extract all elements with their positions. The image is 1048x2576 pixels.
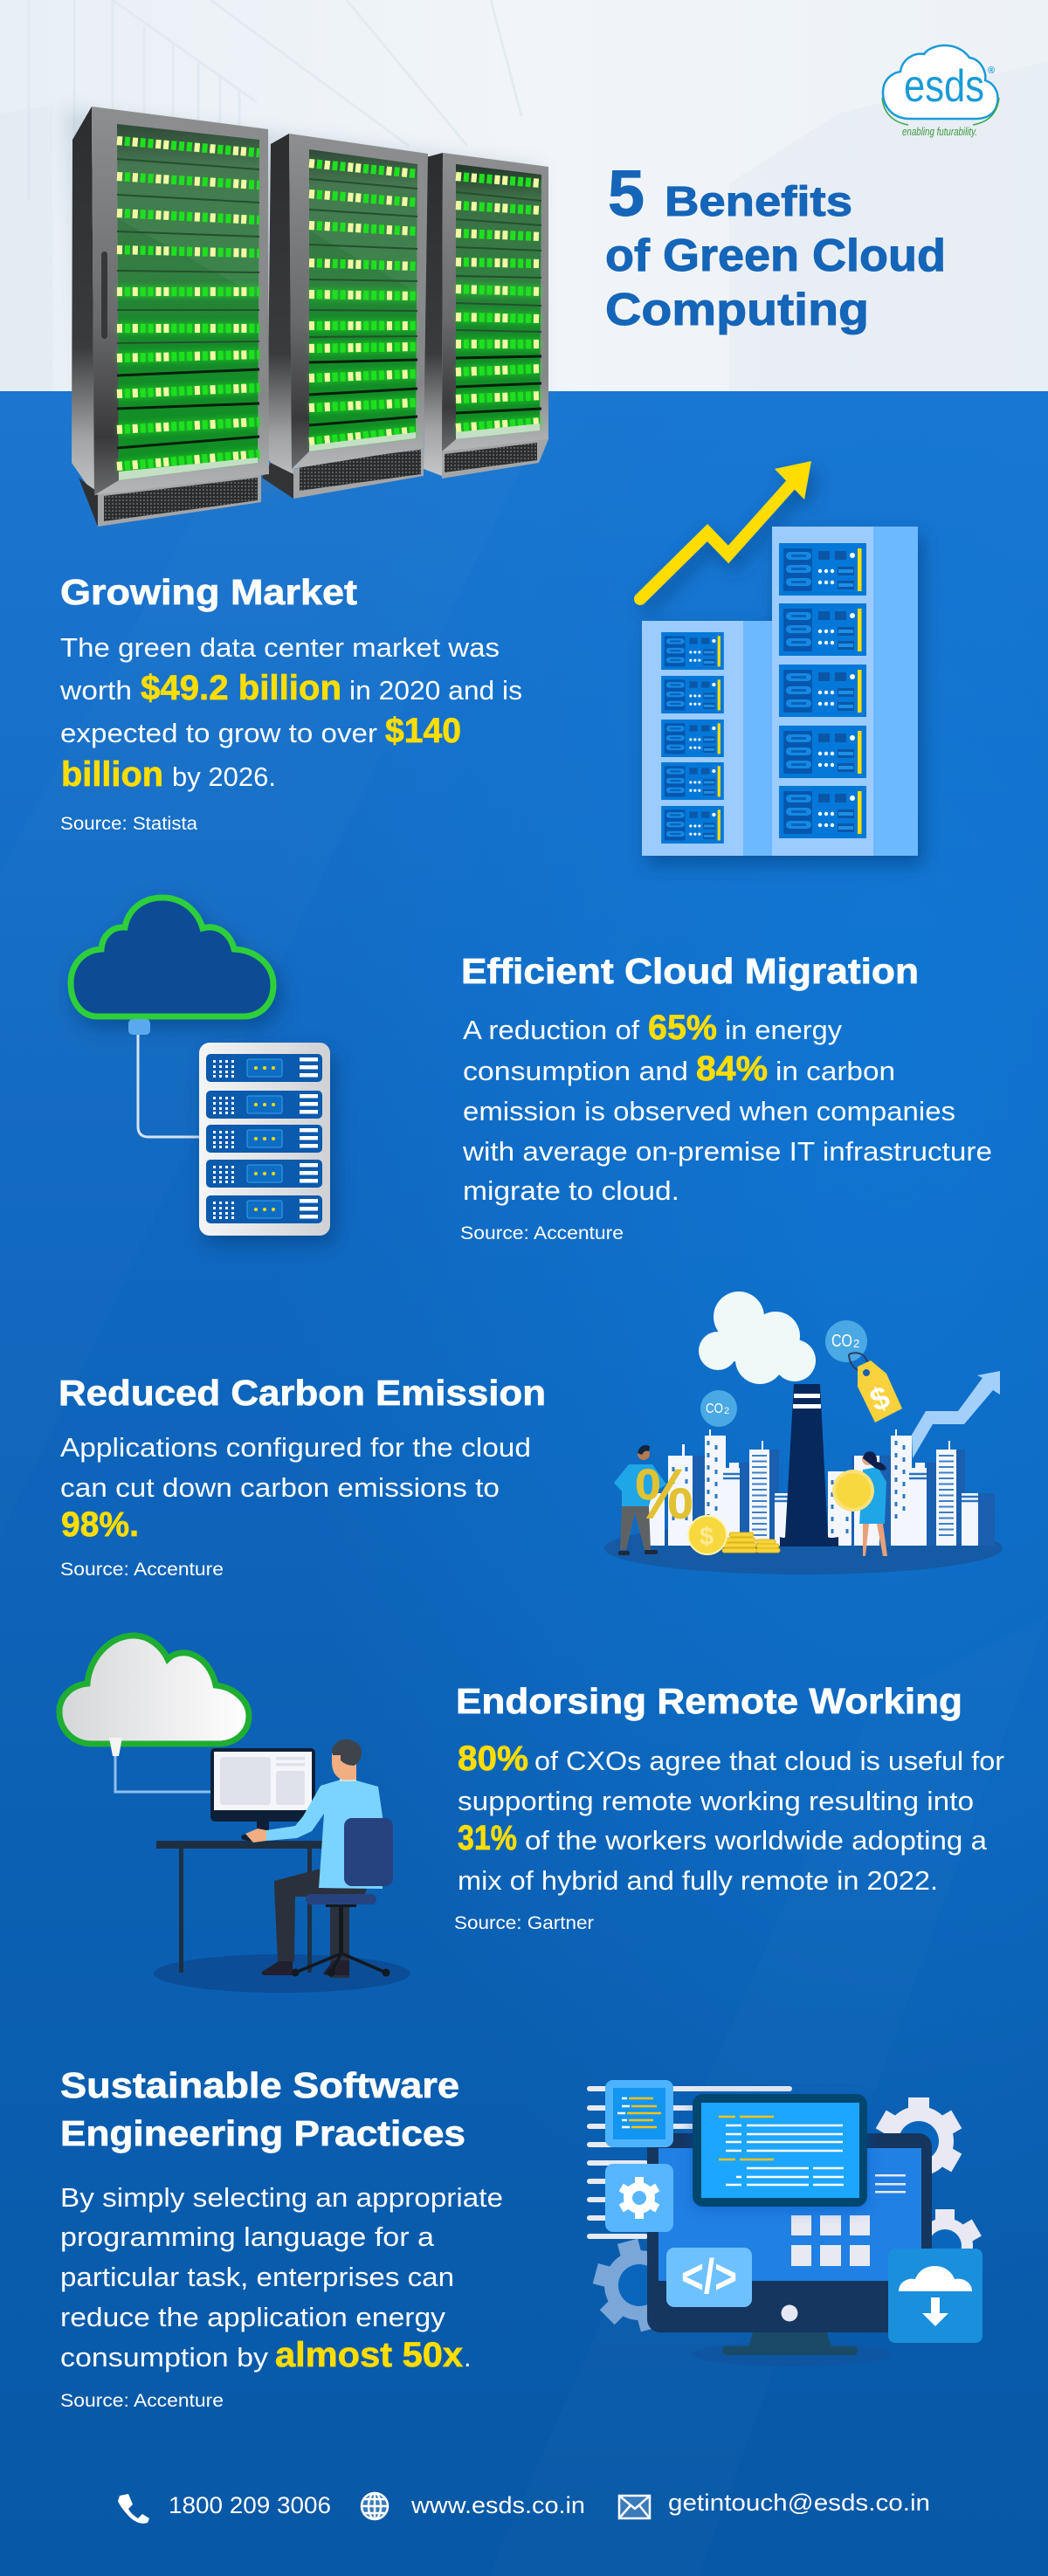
buildings	[647, 1429, 995, 1546]
logo: esds: enabling futurability.	[902, 125, 977, 138]
panel: reduced carbon emission text	[59, 1373, 546, 1580]
price tag: $	[865, 1379, 894, 1418]
body text: in energy	[725, 1015, 843, 1045]
icon: cloud	[59, 1636, 249, 1744]
body text: migrate to cloud.	[463, 1175, 679, 1206]
code window	[693, 2094, 867, 2207]
co2 bubble: CO	[831, 1332, 852, 1351]
phone card	[605, 2080, 673, 2147]
body text: By simply selecting an appropriate	[60, 2182, 503, 2213]
logo: esds: esds	[904, 61, 984, 112]
illustration: remote worker	[59, 1636, 410, 1993]
body text	[458, 1739, 1004, 1896]
body text: Applications configured for the cloud	[60, 1432, 531, 1463]
body text: worth	[59, 675, 132, 706]
body text: .	[464, 2342, 472, 2373]
panel: efficient cloud migration text	[460, 951, 992, 1243]
body text: by 2026.	[172, 761, 276, 792]
body text	[462, 1009, 992, 1206]
icon: globe	[362, 2493, 388, 2519]
connector	[128, 1019, 201, 1137]
far leg	[330, 1899, 349, 1978]
body text: programming language for a	[60, 2221, 435, 2252]
rack 2	[262, 134, 428, 499]
co2 bubble	[700, 1390, 737, 1427]
co2 bubble: 2	[724, 1406, 729, 1416]
icon: cloud	[71, 898, 273, 1016]
growth arrow	[912, 1371, 1000, 1458]
settings card	[605, 2164, 673, 2232]
body text: 98%.	[61, 1505, 139, 1544]
co2 bubble: 2	[853, 1337, 859, 1350]
person	[241, 1739, 393, 1978]
co2 bubble	[825, 1320, 867, 1362]
arrow: growth	[640, 461, 811, 599]
body text: supporting remote working resulting into	[458, 1786, 974, 1816]
panel: growing market text	[59, 572, 522, 834]
smoke cloud	[699, 1291, 816, 1384]
body text: in carbon	[776, 1056, 895, 1086]
website: www.esds.co.in	[410, 2492, 585, 2518]
logo: esds	[882, 45, 999, 138]
body text: of CXOs agree that cloud is useful for	[534, 1746, 1004, 1776]
person: man with percent	[614, 1445, 693, 1555]
server towers	[642, 527, 918, 856]
body text: $49.2 billion	[141, 669, 341, 707]
title: Computing	[605, 285, 869, 335]
panel: endorsing remote working text	[454, 1681, 1004, 1933]
title	[605, 157, 946, 335]
body text: with average on-premise IT infrastructure	[462, 1136, 992, 1167]
body text: consumption by	[60, 2342, 269, 2373]
heading: sustainable software engineering practices	[60, 2065, 465, 2153]
body text: A reduction of	[463, 1015, 639, 1045]
heading: sustainable software engineering practices: Engineering Practices	[60, 2113, 465, 2153]
person: man with percent: %	[635, 1455, 693, 1534]
illustration: cloud connected to server	[71, 898, 330, 1236]
coins: $	[700, 1523, 714, 1551]
body text: 84%	[696, 1050, 768, 1088]
icon: phone	[118, 2494, 149, 2524]
rack 1	[72, 107, 269, 527]
illustration: software development screen	[587, 2080, 982, 2366]
monitor	[647, 2133, 932, 2355]
body text: 80%	[458, 1739, 528, 1778]
body text	[59, 632, 522, 794]
chimney	[780, 1384, 838, 1546]
email: getintouch@esds.co.in	[668, 2490, 930, 2516]
title: Benefits	[665, 179, 852, 225]
body text: of the workers worldwide adopting a	[525, 1825, 988, 1856]
chair	[292, 1818, 393, 1977]
body text: almost 50x	[275, 2336, 463, 2374]
body text: can cut down carbon emissions to	[60, 1472, 500, 1503]
coins	[688, 1516, 780, 1554]
source: Source: Gartner	[454, 1913, 594, 1933]
body text: emission is observed when companies	[463, 1096, 955, 1126]
heading: growing market: Growing Market	[60, 572, 357, 612]
body text: 31%	[458, 1819, 517, 1857]
body text	[60, 1432, 531, 1544]
body text: consumption and	[463, 1056, 688, 1086]
body text	[60, 2182, 503, 2374]
body text: expected to grow to over	[60, 718, 377, 748]
body text: particular task, enterprises can	[60, 2262, 454, 2292]
body text: $140	[385, 712, 461, 750]
icon: server	[199, 1043, 330, 1236]
phone number: 1800 209 3006	[169, 2492, 331, 2518]
body text: mix of hybrid and fully remote in 2022.	[458, 1865, 938, 1896]
icon: mail	[619, 2496, 650, 2518]
body text: in 2020 and is	[349, 675, 522, 706]
heading: reduced carbon emission: Reduced Carbon Emission	[59, 1373, 546, 1413]
gears	[596, 2097, 976, 2329]
panel: sustainable software text	[60, 2065, 503, 2411]
back lines	[587, 2086, 792, 2239]
server racks	[66, 107, 548, 527]
heading: endorsing remote working: Endorsing Remote Working	[456, 1681, 962, 1721]
footer contacts	[118, 2490, 930, 2524]
title: 5	[608, 157, 645, 230]
body text: billion	[61, 755, 163, 794]
illustration: growing servers with arrow	[640, 461, 918, 856]
title: of Green Cloud	[605, 231, 946, 281]
price tag	[849, 1353, 902, 1422]
co2 bubble: CO	[706, 1402, 723, 1416]
code card: </>	[681, 2249, 737, 2304]
illustration: city and chimney	[604, 1291, 1003, 1574]
source: Source: Accenture	[60, 2391, 224, 2411]
source: Source: Accenture	[60, 1560, 224, 1580]
rack 3	[424, 153, 548, 479]
logo: esds: ®	[988, 65, 995, 76]
heading: efficient cloud migration: Efficient Cloud Migration	[461, 951, 919, 991]
connector	[109, 1738, 214, 1792]
cloud download card	[888, 2249, 982, 2343]
source: Source: Accenture	[460, 1223, 624, 1243]
person: woman with coin	[832, 1451, 887, 1556]
heading: sustainable software engineering practices: Sustainable Software	[60, 2065, 459, 2105]
monitor	[210, 1748, 315, 1831]
body text: reduce the application energy	[60, 2302, 446, 2332]
body text: 65%	[648, 1009, 717, 1047]
body text: The green data center market was	[60, 632, 500, 663]
source: Source: Statista	[60, 814, 197, 834]
desk	[156, 1841, 324, 1973]
